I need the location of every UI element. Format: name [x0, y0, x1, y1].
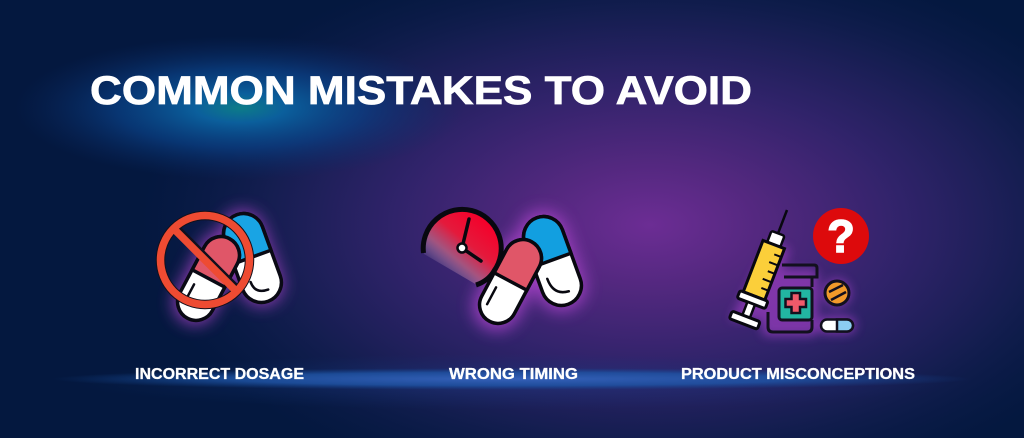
- clock: [423, 209, 502, 285]
- label: wrong timing: WRONG TIMING: [449, 366, 578, 383]
- glow behind capsules: [464, 204, 593, 339]
- glow behind capsules: [165, 203, 290, 332]
- prohibition sign: [160, 216, 250, 304]
- title: COMMON MISTAKES TO AVOID: [90, 69, 752, 113]
- glow behind objects: [730, 240, 856, 336]
- red capsule: [473, 233, 548, 330]
- syringe: [729, 205, 801, 329]
- label: incorrect dosage: INCORRECT DOSAGE: [135, 366, 304, 383]
- orange tablet: [825, 281, 849, 305]
- small capsule: [821, 320, 853, 332]
- blue capsule: [218, 208, 287, 308]
- icon: wrong timing clock and capsules: [423, 204, 593, 339]
- question mark badge: ?: [827, 211, 855, 262]
- medicine bottle: [768, 265, 817, 332]
- blue capsule: [518, 211, 587, 311]
- icon: product misconceptions syringe and medicine: [729, 205, 869, 336]
- red capsule: [171, 230, 246, 327]
- icon: incorrect dosage crossed-out capsules: [160, 203, 290, 332]
- label: product misconceptions: PRODUCT MISCONCEPTIONS: [681, 366, 915, 383]
